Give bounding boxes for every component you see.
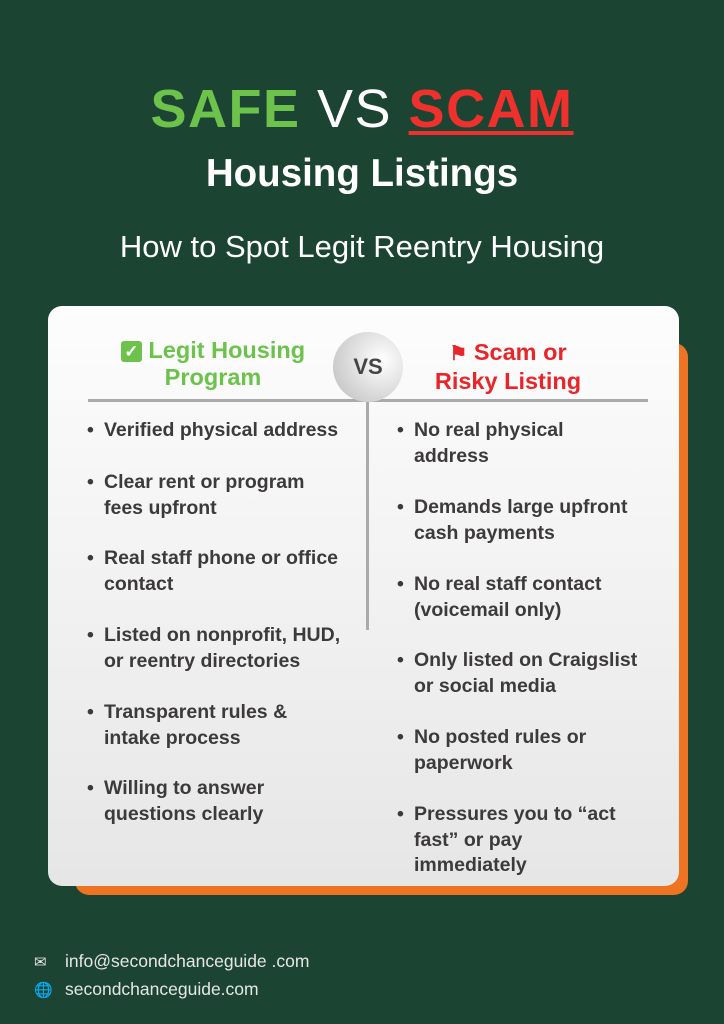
list: legit: or reentry directories	[104, 650, 300, 672]
footer contact: info@secondchanceguide .com	[65, 951, 309, 971]
list: legit	[88, 419, 340, 824]
list: legit: questions clearly	[104, 802, 263, 824]
footer contact	[34, 951, 309, 999]
list: scam: Demands large upfront	[414, 496, 627, 518]
list: scam: paperwork	[414, 752, 513, 774]
list: scam: No real staff contact	[414, 573, 601, 595]
heading: legit	[121, 337, 305, 390]
list: scam: immediately	[414, 854, 527, 876]
list: legit: Willing to answer	[104, 777, 264, 799]
list: scam: or social media	[414, 674, 556, 696]
heading: legit: ✓	[124, 342, 139, 361]
list: scam: fast” or pay	[414, 828, 522, 850]
list: legit: Real staff phone or office	[104, 547, 338, 569]
list: scam: (voicemail only)	[414, 598, 561, 620]
subtitle: Housing Listings	[206, 152, 518, 195]
footer contact: 🌐	[34, 982, 53, 999]
list: scam: Only listed on Craigslist	[414, 649, 637, 671]
title: SAFE VS SCAM	[150, 79, 574, 139]
list: legit: fees upfront	[104, 496, 217, 518]
list: legit: contact	[104, 572, 173, 594]
orange backing card	[75, 343, 688, 895]
heading: legit: Legit Housing	[148, 337, 305, 363]
divider lines	[88, 399, 648, 402]
list: scam: cash payments	[414, 522, 555, 544]
heading: legit: Program	[165, 364, 261, 390]
icon: VS circle: VS	[353, 354, 383, 379]
heading: scam	[435, 339, 581, 394]
panel: comparison card	[48, 306, 679, 886]
heading: scam: ⚑ Scam or	[449, 339, 567, 365]
list: scam	[398, 419, 637, 876]
list: scam: No real physical	[414, 419, 564, 441]
icon: VS circle	[333, 332, 403, 402]
list: legit: Transparent rules &	[104, 701, 287, 723]
heading: scam: Risky Listing	[435, 368, 581, 394]
list: scam: Pressures you to “act	[414, 803, 616, 825]
footer contact: secondchanceguide.com	[65, 979, 259, 999]
list: legit: Listed on nonprofit, HUD,	[104, 624, 340, 646]
list: legit: intake process	[104, 726, 241, 748]
list: scam: address	[414, 444, 489, 466]
list: scam: No posted rules or	[414, 726, 586, 748]
footer contact: ✉	[34, 954, 47, 971]
tagline: How to Spot Legit Reentry Housing	[120, 229, 604, 264]
list: legit: Verified physical address	[104, 419, 338, 441]
list: legit: Clear rent or program	[104, 471, 304, 493]
